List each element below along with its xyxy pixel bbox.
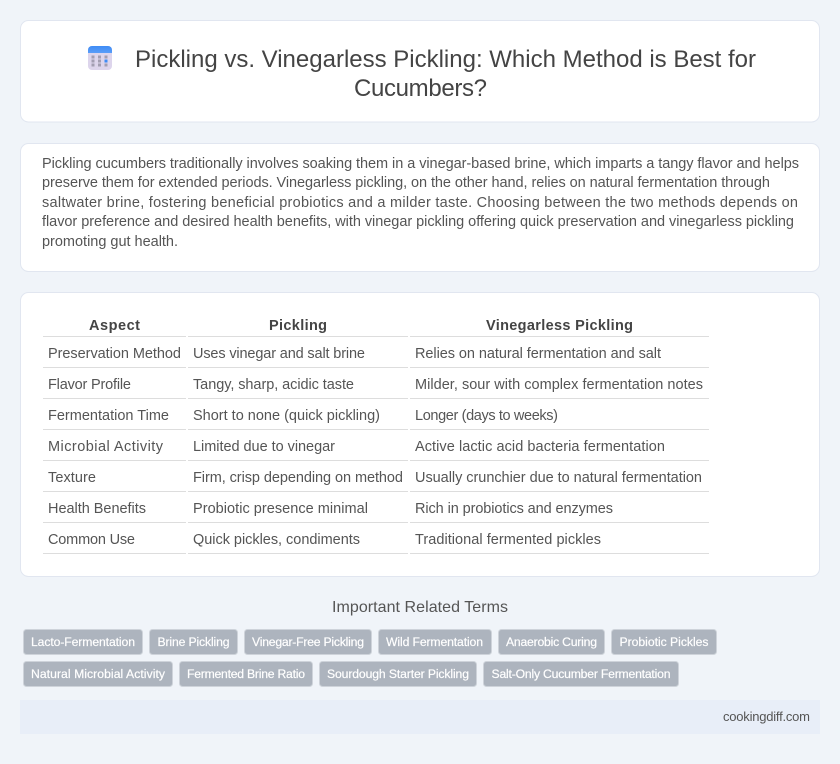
table row: texture: Usually crunchier due to natural fermentation (415, 470, 702, 486)
table header (43, 318, 709, 336)
tag: wild fermentation (378, 630, 492, 654)
table row: health benefits: Probiotic presence minimal (193, 501, 368, 517)
text block: introduction paragraph: promoting gut health. (42, 234, 178, 250)
table header: Aspect (89, 318, 140, 334)
footer (20, 700, 820, 734)
table row: microbial activity: Microbial Activity (48, 439, 164, 455)
panel: introduction (20, 144, 820, 272)
title: Cucumbers? (354, 75, 487, 102)
tag: probiotic pickles: Probiotic Pickles (620, 635, 708, 649)
table row: flavor profile: Milder, sour with complex fermentation notes (415, 377, 703, 393)
tag: lacto-fermentation (24, 630, 142, 654)
table row: preservation method: Preservation Method (48, 346, 181, 362)
table row: preservation method: Uses vinegar and salt brine (193, 346, 365, 362)
table row: common use: Common Use (48, 532, 135, 548)
table row: texture (43, 470, 709, 492)
table row: texture: Texture (48, 470, 96, 486)
table row: health benefits: Health Benefits (48, 501, 146, 517)
footer: cookingdiff.com (723, 709, 810, 724)
table row: fermentation time: Longer (days to weeks) (415, 408, 558, 424)
tag list: related terms (24, 630, 716, 686)
table row: health benefits: Rich in probiotics and enzymes (415, 501, 613, 517)
text block: introduction paragraph (42, 156, 799, 250)
table row: common use: Quick pickles, condiments (193, 532, 360, 548)
tag: fermented brine ratio (180, 662, 312, 686)
text block: introduction paragraph: preserve them for extended periods. Vinegarless pickling, on the other hand, relies on natural fermentation through (42, 175, 770, 191)
heading: important related terms: Important Related Terms (332, 599, 508, 616)
tag: brine pickling (150, 630, 238, 654)
table header: Pickling (269, 318, 327, 334)
table row: common use (43, 532, 709, 554)
panel: header (20, 20, 820, 122)
table row: common use: Traditional fermented pickles (415, 532, 601, 548)
table header: Vinegarless Pickling (486, 318, 633, 334)
tag: fermented brine ratio: Fermented Brine Ratio (187, 667, 305, 681)
table row: flavor profile: Flavor Profile (48, 377, 131, 393)
tag: probiotic pickles (612, 630, 716, 654)
tag: sourdough starter pickling (320, 662, 476, 686)
tag: salt-only cucumber fermentation (484, 662, 678, 686)
text block: introduction paragraph: flavor preference and desired health benefits, with vinegar pickling offering quick preservation and vinegarless pickling (42, 214, 794, 230)
table row: fermentation time (43, 408, 709, 430)
tag: natural microbial activity (24, 662, 172, 686)
title: Pickling vs. Vinegarless Pickling: Which Method is Best for (135, 46, 756, 73)
tag: anaerobic curing: Anaerobic Curing (506, 635, 597, 649)
tag: vinegar-free pickling (244, 630, 372, 654)
tag: brine pickling: Brine Pickling (158, 635, 230, 649)
tag: wild fermentation: Wild Fermentation (386, 635, 483, 649)
table row: flavor profile: Tangy, sharp, acidic taste (193, 377, 354, 393)
tag: natural microbial activity: Natural Microbial Activity (31, 667, 166, 681)
tag: anaerobic curing (498, 630, 604, 654)
table row: preservation method: Relies on natural fermentation and salt (415, 346, 661, 362)
table row: microbial activity (43, 439, 709, 460)
tag: sourdough starter pickling: Sourdough Starter Pickling (327, 667, 469, 681)
table row: fermentation time: Fermentation Time (48, 408, 169, 424)
icon: calendar (88, 46, 112, 70)
tag: lacto-fermentation: Lacto-Fermentation (31, 635, 135, 649)
table row: microbial activity: Limited due to vinegar (193, 439, 335, 455)
table row: fermentation time: Short to none (quick pickling) (193, 408, 380, 424)
table row: texture: Firm, crisp depending on method (193, 470, 403, 486)
text block: introduction paragraph: saltwater brine, fostering beneficial probiotics and a milder taste. Choosing between the two methods depends on (42, 195, 798, 211)
tag: vinegar-free pickling: Vinegar-Free Pickling (252, 635, 364, 649)
table row: preservation method (43, 346, 709, 368)
panel: comparison table (20, 292, 820, 576)
tag: salt-only cucumber fermentation: Salt-Only Cucumber Fermentation (492, 667, 670, 681)
table row: flavor profile (43, 377, 709, 398)
table row: microbial activity: Active lactic acid bacteria fermentation (415, 439, 665, 455)
table row: health benefits (43, 501, 709, 522)
title (135, 46, 756, 102)
text block: introduction paragraph: Pickling cucumbers traditionally involves soaking them in a vinegar-based brine, which imparts a tangy flavor and helps (42, 156, 799, 172)
